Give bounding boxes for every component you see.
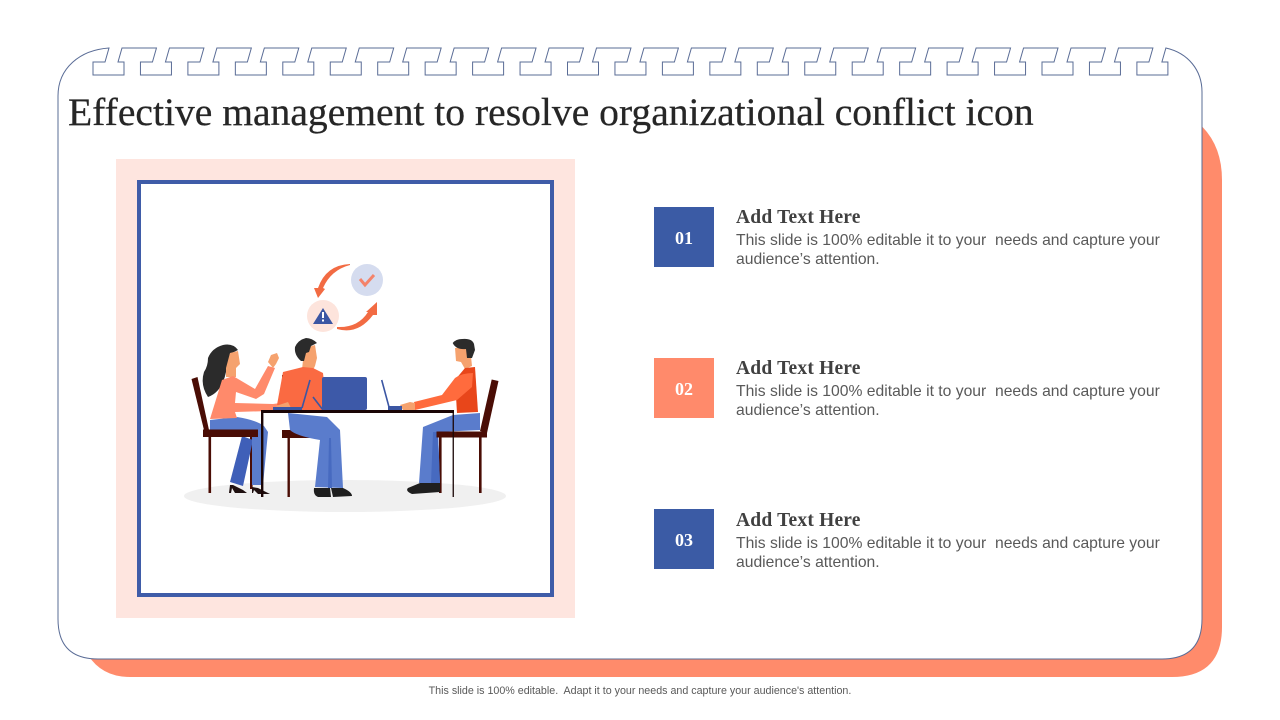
torso xyxy=(277,367,327,410)
hand xyxy=(276,402,291,411)
shoes xyxy=(229,485,247,493)
arrow: warning to check xyxy=(337,302,377,330)
man one xyxy=(273,338,352,497)
head xyxy=(455,347,472,369)
title: Effective management to resolve organizational conflict icon xyxy=(68,90,1034,134)
arm xyxy=(414,373,473,410)
item 01 number badge xyxy=(654,207,714,267)
item 03 heading: Add Text Here xyxy=(736,510,861,531)
white card outline xyxy=(58,48,1202,659)
item 03 number badge xyxy=(654,509,714,569)
item 02 heading: Add Text Here xyxy=(736,358,861,379)
right chair xyxy=(439,380,498,493)
table xyxy=(261,410,454,497)
hair xyxy=(203,345,238,397)
left pink panel xyxy=(116,159,575,618)
pants xyxy=(288,413,343,488)
item 01 heading: Add Text Here xyxy=(736,207,861,228)
footer note: This slide is 100% editable. Adapt it to your needs and capture your audience's attention. xyxy=(429,685,851,697)
item 01 text: This slide is 100% editable it to your needs and capture your audience’s attention. xyxy=(736,232,1160,268)
torso and arms xyxy=(210,366,288,419)
floor shadow xyxy=(184,480,506,512)
icon: warning circle xyxy=(307,300,339,332)
blue framed picture box xyxy=(139,182,552,595)
item 03 number badge: 03 xyxy=(675,530,693,550)
back leg xyxy=(230,436,253,486)
head xyxy=(226,351,240,377)
left chair xyxy=(192,377,253,493)
illustration: team meeting resolving conflict xyxy=(184,264,506,512)
raised hand xyxy=(268,353,279,368)
item 03 text: This slide is 100% editable it to your needs and capture your audience’s attention. xyxy=(736,535,1160,571)
item 02 text: This slide is 100% editable it to your needs and capture your audience’s attention. xyxy=(736,383,1160,419)
center laptop xyxy=(322,377,367,410)
hair xyxy=(453,339,475,358)
side laptop xyxy=(382,380,389,407)
item 02 number badge: 02 xyxy=(675,379,693,399)
item 01 number badge: 01 xyxy=(675,228,693,248)
small laptop xyxy=(302,380,310,408)
torso xyxy=(455,367,478,413)
hair xyxy=(295,338,317,361)
man two xyxy=(382,339,480,494)
icon: check mark circle xyxy=(351,264,383,296)
hand xyxy=(400,402,415,410)
pants xyxy=(419,413,480,483)
pants xyxy=(210,417,268,485)
right chair seat xyxy=(436,432,487,438)
middle chair xyxy=(282,375,320,497)
shoes xyxy=(314,488,331,497)
woman xyxy=(203,345,288,494)
head xyxy=(302,345,317,372)
orange backing shape xyxy=(88,121,1222,677)
item 02 number badge xyxy=(654,358,714,418)
shoe xyxy=(407,483,440,494)
arrow: check to warning xyxy=(314,264,350,298)
left chair seat xyxy=(203,430,258,437)
